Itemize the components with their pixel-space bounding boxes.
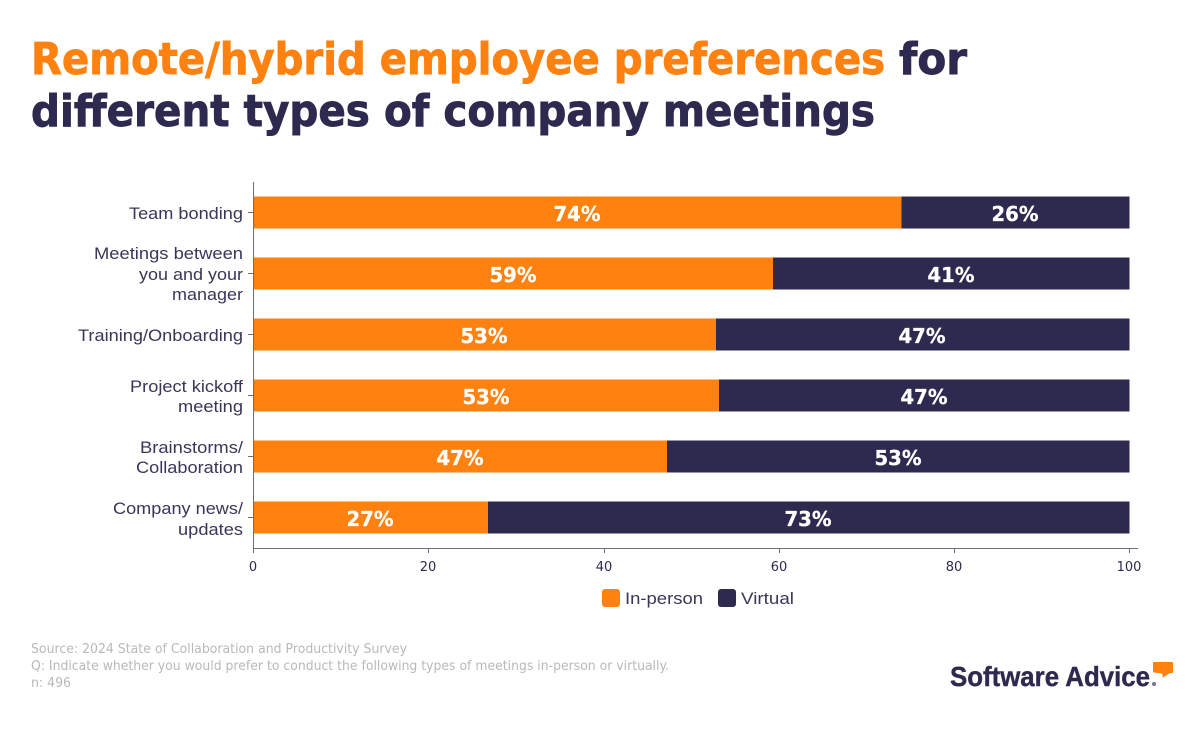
bar: Meetings between you and your manager: 41% [928,263,974,287]
source note [31,642,669,691]
bar: Brainstorms/Collaboration: 53% [874,446,922,470]
x axis labels: 60 [771,560,787,575]
y axis category labels: Team bonding [129,204,243,223]
y axis category labels: Collaboration [136,458,243,477]
y axis category labels: you and your [139,265,243,284]
bar: Company news/updates [254,502,1130,534]
bar: Company news/updates: 73% [784,507,832,531]
y axis category labels: updates [178,520,243,539]
bar: Company news/updates: 27% [346,507,394,531]
bar: Project kickoff meeting: 53% [462,385,510,409]
axes [248,182,1138,553]
source note: Q: Indicate whether you would prefer to conduct the following types of meetings in-person or virtually. [31,659,669,674]
x axis labels [249,560,1141,575]
x axis labels: 20 [420,560,436,575]
y axis category labels: Company news/ [113,499,243,518]
y axis category labels: Brainstorms/ [140,438,243,457]
y axis category labels: meeting [178,397,243,416]
bar: Brainstorms/Collaboration: 47% [436,446,484,470]
x axis labels: 100 [1117,560,1141,575]
stacked bar chart [78,182,1141,575]
source note: n: 496 [31,676,71,691]
legend: In-person [625,589,703,608]
y axis category labels: Meetings between [94,244,243,263]
x axis labels: 0 [249,560,257,575]
bar: Training/Onboarding [254,318,1130,350]
bar: Training/Onboarding: 53% [460,324,508,348]
bar: Team bonding: 26% [992,202,1038,226]
legend [602,589,794,608]
logo: Software Advice: Software Advice [950,661,1150,692]
bar: Brainstorms/Collaboration [254,440,1130,472]
legend: Virtual [741,589,794,608]
x axis labels: 40 [596,560,612,575]
bar: Project kickoff meeting: 47% [900,385,948,409]
source note: Source: 2024 State of Collaboration and Productivity Survey [31,642,407,657]
bar: Team bonding: 74% [554,202,600,226]
y axis category labels: Project kickoff [130,377,243,396]
bar: Project kickoff meeting [254,380,1130,412]
bar: Training/Onboarding: 47% [898,324,946,348]
title: for [899,34,967,85]
y axis category labels: Training/Onboarding [78,326,243,345]
title [31,34,967,137]
icon: orange speech bubble [1153,662,1173,678]
y axis category labels: manager [172,285,243,304]
title: different types of company meetings [31,86,875,137]
y axis category labels [78,204,243,539]
bar: Team bonding [254,196,1130,228]
x axis labels: 80 [946,560,962,575]
bar: Meetings between you and your manager [254,258,1130,290]
bar: Meetings between you and your manager: 59% [490,263,536,287]
title: Remote/hybrid employee preferences [31,34,885,85]
